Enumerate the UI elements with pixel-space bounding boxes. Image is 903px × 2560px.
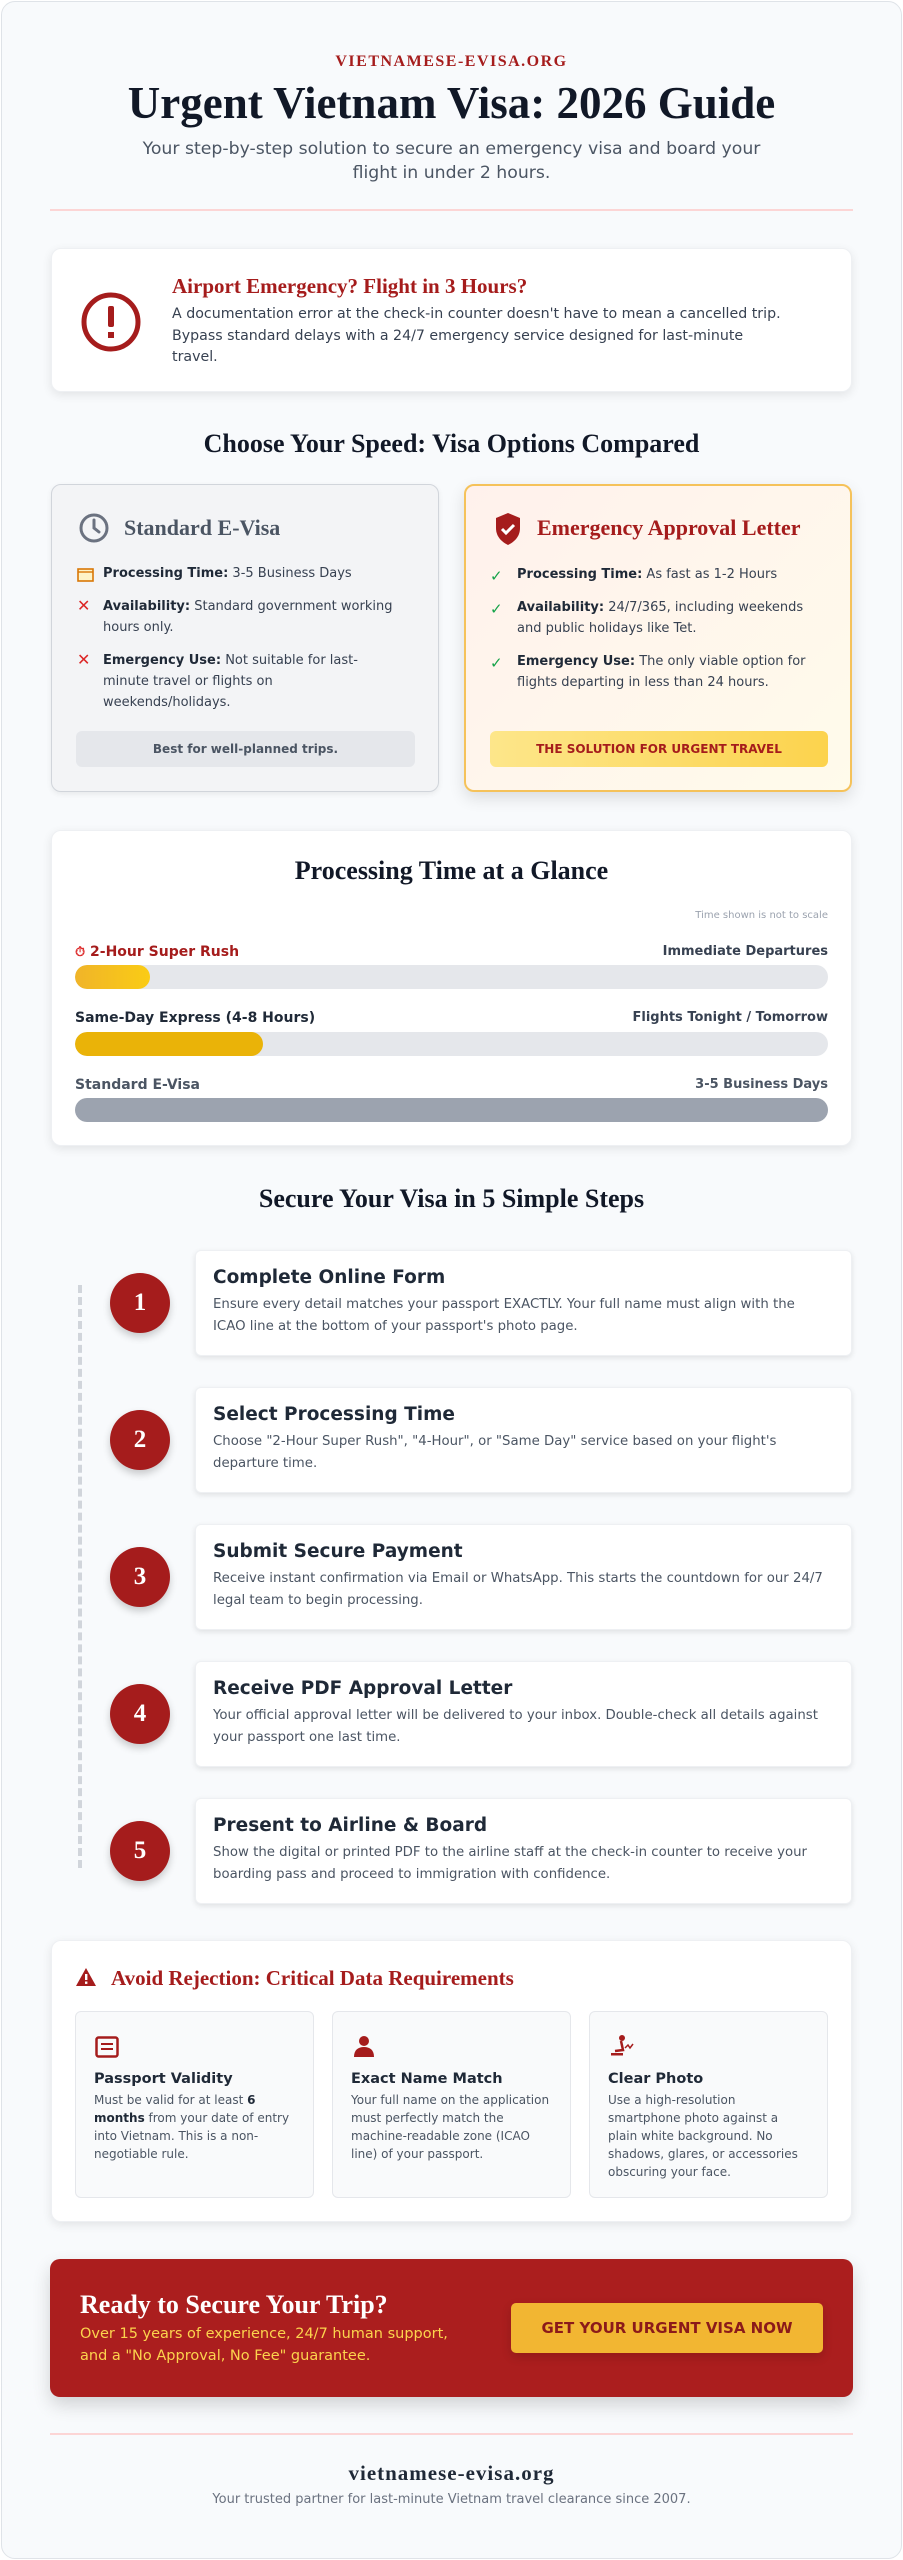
step 1: 1 (134, 1289, 146, 1316)
alert text (172, 306, 781, 365)
chart heading: Processing Time at a Glance (295, 856, 608, 885)
brand label: VIETNAMESE-EVISA.ORG (335, 53, 568, 70)
pill (490, 731, 828, 767)
requirement: passport validity (75, 2011, 314, 2198)
requirement: name match (332, 2011, 571, 2198)
step 5: Show the digital or printed PDF to the airline staff at the check-in counter to receive your boarding pass and proceed to immigration with confidence. (213, 1845, 807, 1882)
items: Processing Time: 3-5 Business Days (103, 566, 352, 581)
pill (76, 731, 415, 767)
requirement: passport validity: months from your date of entry (94, 2111, 289, 2125)
icon: shield (496, 513, 520, 545)
icon: alert circle (82, 292, 140, 352)
panel: emergency approval letter: ✓ (490, 654, 503, 672)
pill: THE SOLUTION FOR URGENT TRAVEL (536, 742, 782, 756)
requirement: name match: must perfectly match the (351, 2111, 504, 2125)
heading: Emergency Approval Letter (537, 515, 801, 540)
step 2 (106, 1387, 853, 1496)
requirement: clear photo: Clear Photo (608, 2071, 703, 2087)
bar row 2: Same-Day Express (4-8 Hours) (75, 1010, 315, 1026)
requirement: passport validity: into Vietnam. This is a non- (94, 2129, 258, 2143)
footer tagline: Your trusted partner for last-minute Vietnam travel clearance since 2007. (212, 2492, 691, 2507)
footer site: vietnamese-evisa.org (348, 2461, 555, 2485)
requirement: clear photo: obscuring your face. (608, 2165, 731, 2179)
bar row 3: 3-5 Business Days (695, 1077, 828, 1092)
alert text: Bypass standard delays with a 24/7 emergency service designed for last-minute (172, 328, 743, 344)
subtitle: Your step-by-step solution to secure an emergency visa and board your flight in under 2 hours. (143, 139, 760, 183)
step 3: Submit Secure Payment (213, 1541, 463, 1562)
panel: standard e-visa: Availability: Standard government working hours only. (103, 599, 392, 635)
step 3 (106, 1524, 853, 1633)
step 1 (106, 1250, 853, 1359)
bar row 2: Flights Tonight / Tomorrow (632, 1010, 828, 1025)
requirement: passport validity: Must be valid for at least 6 (94, 2093, 256, 2107)
step 2: 2 (134, 1426, 146, 1453)
requirement: clear photo: Use a high-resolution (608, 2093, 735, 2107)
CTA button (511, 2303, 823, 2353)
requirement: name match: Your full name on the application (351, 2093, 549, 2107)
alert text: A documentation error at the check-in counter doesn't have to mean a cancelled trip. (172, 306, 781, 322)
CTA heading: Ready to Secure Your Trip? (80, 2290, 388, 2319)
step 5: Present to Airline & Board (213, 1815, 487, 1836)
step 3: Receive instant confirmation via Email or WhatsApp. This starts the countdown for our 24/7 legal team to begin processing. (213, 1571, 823, 1608)
step 5: 5 (134, 1837, 146, 1864)
step 2: Choose "2-Hour Super Rush", "4-Hour", or "Same Day" service based on your flight's departure time. (213, 1434, 776, 1470)
heading: Standard E-Visa (124, 515, 280, 540)
panel: standard e-visa (51, 484, 439, 792)
panel: standard e-visa: Emergency Use: Not suitable for last-minute travel or flights on weekends/holidays. (103, 653, 358, 710)
step 4: Receive PDF Approval Letter (213, 1678, 512, 1699)
alert card (51, 248, 852, 392)
step 2: Select Processing Time (213, 1404, 455, 1425)
panel: emergency approval letter: Availability: 24/7/365, including weekends and public holidays like Tet. (517, 600, 803, 636)
timeline dashed line (78, 1285, 82, 1868)
step 4 (106, 1661, 853, 1770)
step 5 (106, 1798, 853, 1907)
item icons (77, 568, 94, 582)
step 1: Complete Online Form (213, 1267, 445, 1288)
bar row 1: Immediate Departures (663, 944, 828, 959)
pill: Best for well-planned trips. (153, 742, 338, 756)
panel: emergency approval letter: Emergency Use: The only viable option for flights departing in less than 24 hours. (517, 654, 806, 690)
panel: emergency approval letter (464, 484, 852, 792)
bar row 3 (75, 1077, 828, 1122)
requirement: passport validity: Passport Validity (94, 2071, 233, 2087)
title: Urgent Vietnam Visa: 2026 Guide (128, 78, 775, 128)
requirement: clear photo: plain white background. No (608, 2129, 773, 2143)
requirement: clear photo (589, 2011, 828, 2198)
requirement: clear photo: smartphone photo against a (608, 2111, 778, 2125)
requirement: name match: Exact Name Match (351, 2071, 503, 2087)
chart note: Time shown is not to scale (695, 910, 828, 921)
bar row 1: ⏱ 2-Hour Super Rush (75, 944, 239, 960)
panel: emergency approval letter: ✓ (490, 567, 503, 585)
step 4: 4 (134, 1700, 146, 1727)
CTA banner (50, 2259, 853, 2397)
requirement: clear photo: shadows, glares, or accessories (608, 2147, 798, 2161)
panel: standard e-visa: ✕ (77, 596, 90, 615)
alert text: travel. (172, 349, 218, 365)
items: Processing Time: As fast as 1-2 Hours (517, 567, 777, 582)
panel: processing time chart (51, 830, 852, 1146)
step 4: Your official approval letter will be delivered to your inbox. Double-check all details against your passport one last time. (213, 1708, 818, 1744)
panel: emergency approval letter: ✓ (490, 600, 503, 618)
bar row 1 (75, 944, 828, 989)
icon: clock (80, 514, 108, 542)
bar row 2 (75, 1010, 828, 1056)
alert heading: Airport Emergency? Flight in 3 Hours? (172, 274, 527, 298)
CTA button: GET YOUR URGENT VISA NOW (541, 2319, 792, 2337)
steps heading: Secure Your Visa in 5 Simple Steps (259, 1184, 644, 1213)
panel: standard e-visa: ✕ (77, 650, 90, 669)
requirement: name match: line) of your passport. (351, 2147, 483, 2161)
step 1: Ensure every detail matches your passport EXACTLY. Your full name must align with the ICAO line at the bottom of your passport's photo page. (213, 1297, 795, 1334)
step 3: 3 (134, 1563, 146, 1590)
requirement: passport validity: negotiable rule. (94, 2147, 189, 2161)
rejection heading: Avoid Rejection: Critical Data Requirements (111, 1966, 514, 1990)
section heading: compare: Choose Your Speed: Visa Options Compared (204, 429, 699, 458)
panel: avoid rejection (51, 1940, 852, 2222)
requirement: name match: machine-readable zone (ICAO (351, 2129, 530, 2143)
bar row 3: Standard E-Visa (75, 1077, 200, 1093)
CTA text: Over 15 years of experience, 24/7 human support, and a "No Approval, No Fee" guarantee. (80, 2326, 448, 2364)
